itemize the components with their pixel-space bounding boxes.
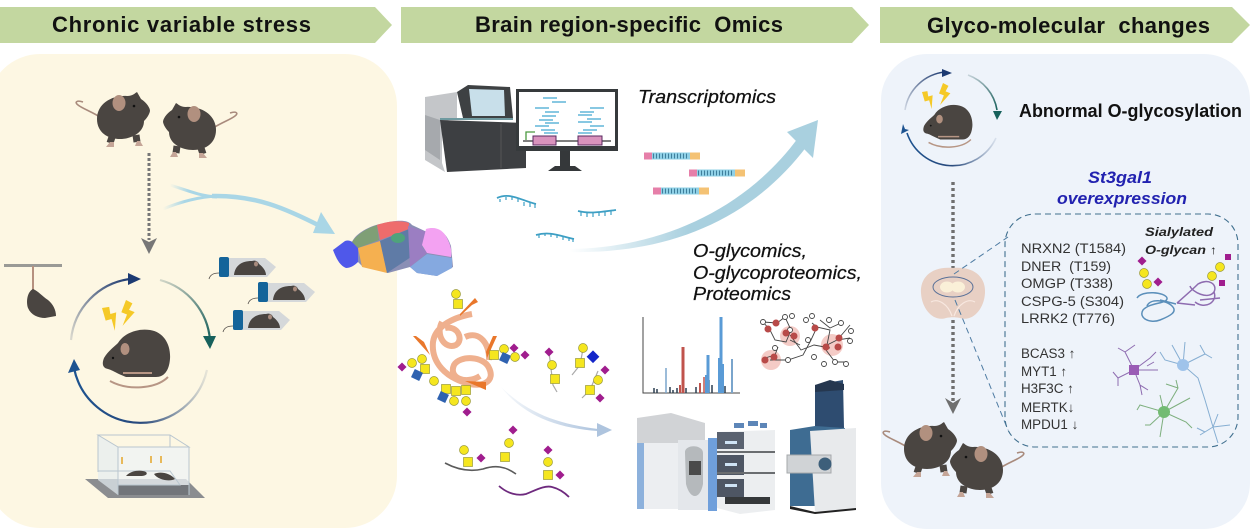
chart: mass spectrum (643, 317, 740, 393)
callout: zoom box (954, 214, 1238, 447)
chart: network (760, 314, 854, 370)
text: glycosites: CSPG-5 (S304) (1021, 294, 1124, 309)
text: differential proteins: BCAS3 ↑ (1021, 346, 1075, 361)
header: chronic variable stress: Chronic variable stress (52, 12, 311, 37)
text: glycosites: LRRK2 (T776) (1021, 311, 1115, 326)
arrow: to brain (163, 185, 335, 234)
text: omics labels: O-glycoproteomics, (693, 262, 862, 283)
text: sialylated O-glycan (1145, 225, 1217, 257)
text: differential proteins (1021, 346, 1078, 432)
text: St3gal1 overexpression: St3gal1 (1088, 168, 1152, 187)
text: omics labels (693, 240, 862, 304)
icon: free glycans (544, 344, 610, 403)
arrow: to transcriptomics (570, 120, 818, 252)
text: glycosites (1021, 241, 1126, 326)
arrow: dotted down to stress cycle (141, 153, 157, 254)
text: sialylated O-glycan: Sialylated (1145, 225, 1214, 239)
arrow: dotted down to mice (945, 182, 961, 414)
text: omics labels: O-glycomics, (693, 240, 807, 261)
icon: stressed mouse (100, 300, 170, 387)
icon: sialylated glycoproteins (1137, 254, 1231, 321)
brain atlas (333, 221, 453, 276)
text: differential proteins: MYT1 ↑ (1021, 364, 1067, 379)
header: chronic variable stress (0, 7, 392, 43)
icon: restraint tubes (209, 257, 315, 332)
arrow: to mass spectrometer (501, 387, 612, 437)
header: glyco-molecular changes: Glyco-molecular changes (927, 13, 1210, 38)
icon: sequencer (425, 85, 618, 172)
text: St3gal1 overexpression: overexpression (1057, 189, 1187, 208)
text: differential proteins: MERTK↓ (1021, 400, 1074, 415)
icon: mass spectrometer (787, 380, 856, 514)
icon: two mice (76, 92, 237, 158)
text: transcriptomics: Transcriptomics (638, 86, 776, 107)
text: sialylated O-glycan: O-glycan ↑ (1145, 243, 1217, 257)
cycle: stress cycle arrows (68, 273, 216, 423)
icon: mini stressed mouse (921, 83, 972, 147)
icon: brain slice (921, 268, 985, 319)
icon: RNA duplexes (644, 156, 745, 191)
text: glycosites: NRXN2 (T1584) (1021, 241, 1126, 256)
panel: chronic variable stress (0, 54, 397, 528)
text: differential proteins: MPDU1 ↓ (1021, 417, 1078, 432)
icon: two mice outcome (883, 422, 1024, 498)
icon: glycoprotein (397, 290, 530, 417)
text: glycosites: DNER (T159) (1021, 259, 1111, 274)
panel: glyco-molecular changes (881, 54, 1250, 529)
header: glyco-molecular changes (880, 7, 1250, 43)
icon: glycopeptides (445, 425, 569, 497)
icon: cage with mice (85, 435, 205, 498)
text: glycosites: OMGP (T338) (1021, 276, 1113, 291)
header: brain region-specific omics: Brain region-specific Omics (475, 12, 783, 37)
header: brain region-specific omics (401, 7, 869, 43)
text: abnormal O-glycosylation: Abnormal O-glycosylation (1019, 100, 1242, 121)
icon: mass spectrometer LC (637, 413, 775, 514)
text: omics labels: Proteomics (693, 283, 791, 304)
icon: neurons (1113, 342, 1230, 443)
icon: RNA strands (497, 196, 616, 242)
icon: tail suspension (4, 264, 62, 318)
text: differential proteins: H3F3C ↑ (1021, 381, 1074, 396)
cycle: mini stress cycle (901, 69, 1002, 166)
text: St3gal1 overexpression (1057, 168, 1187, 208)
